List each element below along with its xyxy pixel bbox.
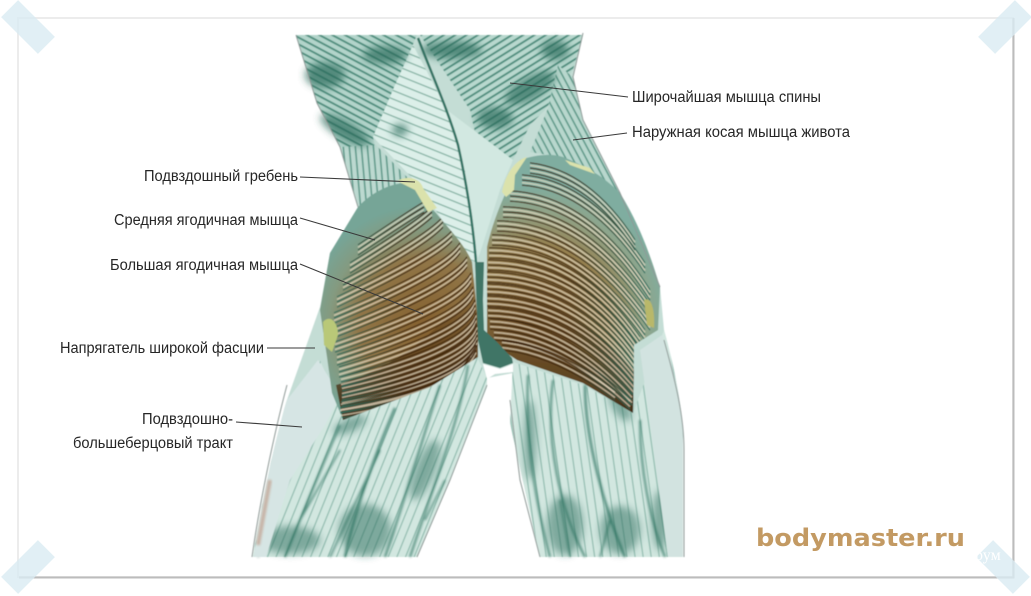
left iliotibial tract — [254, 360, 340, 557]
label: external oblique: Наружная косая мышца живота — [632, 124, 850, 141]
right latissimus dorsi — [420, 35, 583, 200]
label: iliac crest: Подвздошный гребень — [144, 168, 298, 185]
right thigh — [510, 330, 683, 557]
faint watermark fragment: рум — [975, 547, 1001, 564]
left thigh — [253, 355, 487, 557]
label group: leader lines and muscle names — [60, 83, 850, 452]
label: latissimus dorsi: Широчайшая мышца спины — [632, 89, 821, 106]
anatomical illustration: back, gluteal muscles and thighs — [252, 33, 684, 557]
decorative tape: top left — [1, 0, 55, 54]
right tensor fasciae latae — [644, 299, 654, 328]
body base silhouette — [253, 35, 683, 557]
left gluteal dome — [320, 183, 478, 420]
left flank fibres — [340, 145, 410, 207]
thigh muscle separations — [258, 365, 665, 557]
label: gluteus medius: Средняя ягодичная мышца — [114, 212, 298, 229]
left iliac crest — [397, 178, 437, 212]
label: iliotibial tract, second line: большеберцовый тракт — [73, 435, 233, 452]
decorative tape: bottom right — [976, 540, 1030, 594]
decorative tape: top right — [978, 0, 1031, 54]
decorative tape: bottom left — [1, 540, 55, 594]
dark shading patches on back — [305, 40, 569, 152]
watermark: bodymaster.ru: bodymaster.ru — [756, 524, 965, 552]
right aponeurosis strip — [447, 110, 513, 262]
external oblique — [530, 65, 620, 193]
right iliotibial tract — [640, 335, 683, 557]
thin outer contours — [252, 33, 684, 557]
left tensor fasciae latae — [323, 319, 338, 352]
outer thigh tint — [258, 480, 270, 545]
thigh soft shading — [260, 385, 668, 556]
central aponeurosis — [373, 45, 478, 262]
left latissimus dorsi — [296, 35, 417, 160]
label: tensor fasciae latae: Напрягатель широкой фасции — [60, 340, 264, 357]
crotch gap — [483, 364, 513, 379]
right gluteal dome — [487, 155, 660, 413]
label: iliotibial tract, first line: Подвздошно- — [142, 411, 233, 428]
sacrum and coccyx — [475, 262, 513, 368]
right iliac crest — [502, 157, 595, 197]
spine midline — [418, 38, 476, 262]
leader lines — [236, 83, 628, 427]
label: gluteus maximus: Большая ягодичная мышца — [110, 257, 298, 274]
